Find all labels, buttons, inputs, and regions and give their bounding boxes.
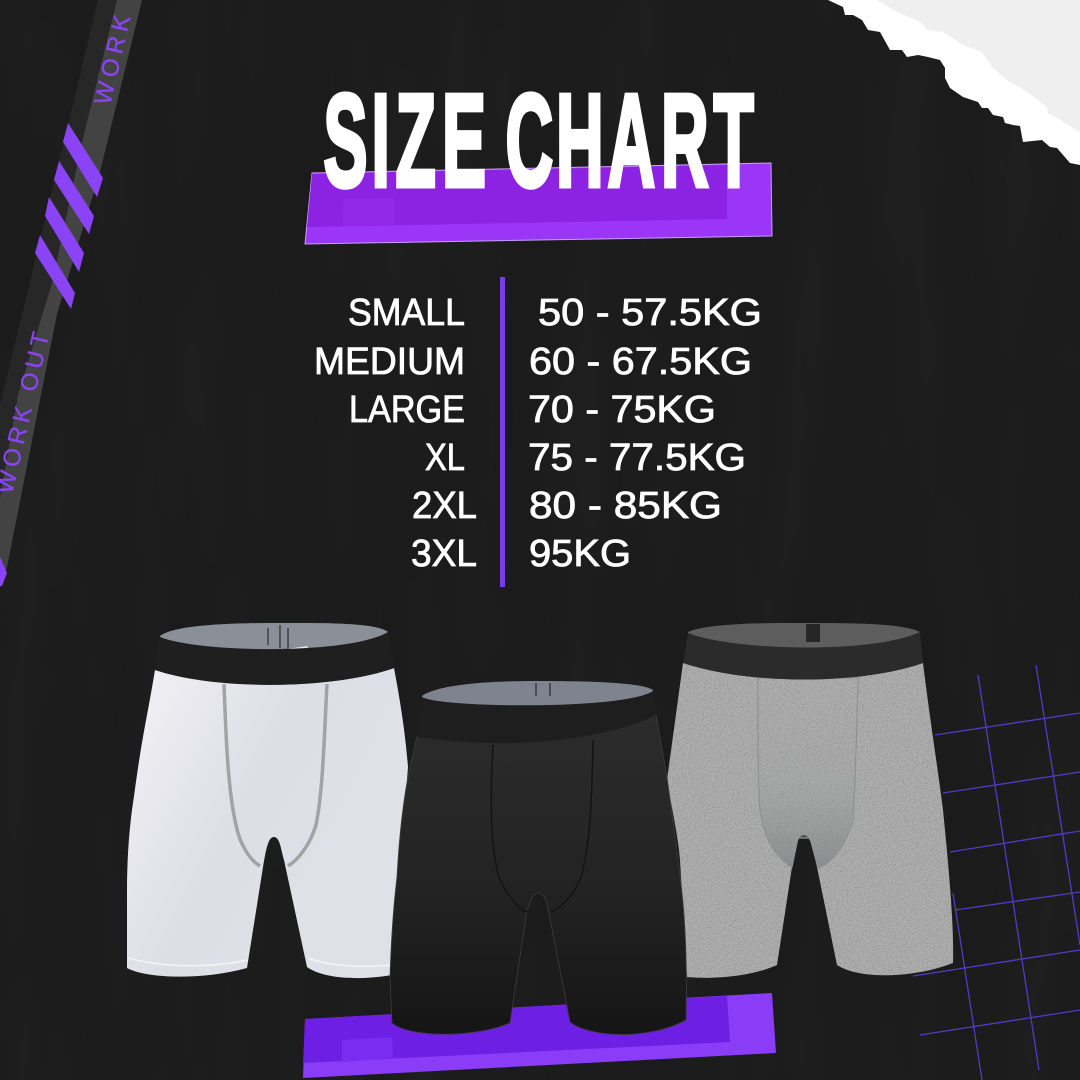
purple base bar <box>303 993 776 1078</box>
shorts: black <box>390 681 686 1034</box>
weight ranges: 95KG <box>529 533 631 575</box>
icon: purple stripes <box>0 123 103 586</box>
shorts: white <box>127 623 408 978</box>
band label: work: WORK <box>90 13 136 107</box>
waist interior <box>160 623 388 655</box>
diagonal work out band <box>0 0 142 588</box>
leg body <box>127 668 408 978</box>
weight ranges: 60 - 67.5KG <box>529 341 752 383</box>
leg body <box>667 663 953 978</box>
waist interior <box>422 681 653 715</box>
size labels: LARGE <box>349 389 465 431</box>
waist interior <box>688 623 920 655</box>
fly seams <box>491 740 593 912</box>
size labels: 3XL <box>411 533 477 575</box>
size labels <box>314 292 477 575</box>
waistband <box>683 632 923 680</box>
waistband <box>417 691 657 743</box>
size labels: MEDIUM <box>314 341 465 383</box>
weight ranges: 80 - 85KG <box>529 485 722 527</box>
shorts: grey <box>667 623 953 978</box>
purple title bar <box>305 163 772 244</box>
weight ranges: 50 - 57.5KG <box>538 292 762 334</box>
title: SIZE CHART <box>324 68 754 215</box>
hem <box>128 958 392 966</box>
size labels: 2XL <box>412 485 477 527</box>
size labels: SMALL <box>348 292 465 334</box>
divider <box>500 277 505 587</box>
waistband <box>155 632 394 685</box>
weight ranges <box>528 292 762 575</box>
size chart table <box>314 277 762 587</box>
purple grid <box>913 665 1080 1080</box>
weight ranges: 70 - 75KG <box>528 389 716 431</box>
weight ranges: 75 - 77.5KG <box>528 437 746 479</box>
size labels: XL <box>425 437 465 479</box>
piping <box>224 684 260 866</box>
crotch gusset <box>758 678 858 868</box>
leg body <box>390 710 686 1034</box>
torn paper corner <box>828 0 1080 165</box>
